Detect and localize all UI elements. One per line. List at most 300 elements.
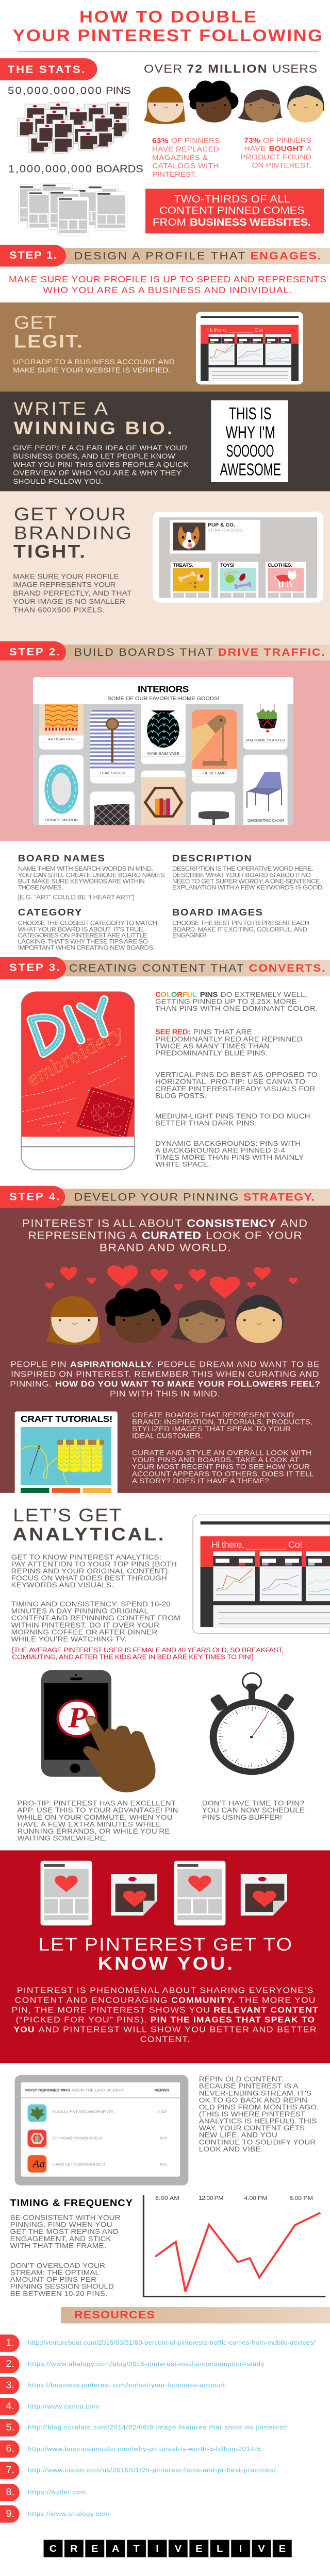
logo: creativelive: [43, 2540, 292, 2557]
stat: 63 percent: OF PINNERS: [171, 137, 220, 145]
step 1 intro: MAKE SURE YOUR PROFILE IS UP TO SPEED AND REPRESENTS: [9, 275, 326, 284]
step 4 banner: [0, 1186, 330, 1208]
step 1 intro: [9, 275, 326, 295]
row: succulent: 1,047: [157, 2110, 168, 2114]
sample bio card: THIS IS: [229, 404, 272, 423]
text: description: EXPLANATION WITH A FEW KEYWORDS IS GOOD.: [172, 884, 324, 891]
stat: 63 percent: 63%: [152, 137, 168, 145]
title: HOW TO DOUBLE: [79, 8, 256, 26]
text: pinterest analytics: REPINS AND YOUR ORIGINAL CONTENT).: [11, 1568, 170, 1575]
text: pinterest analytics: [11, 1554, 177, 1589]
text: board names: YOU CAN STILL CREATE UNIQUE BOARD NAMES: [18, 872, 165, 878]
pin: macrame planter: [243, 704, 288, 750]
analytics tablet: Hi there, ________ Co!: [211, 1540, 302, 1550]
sample bio card: [211, 400, 288, 482]
text: community: CONTENT AND ENCOURAGING: [15, 1995, 167, 2005]
text: vertical pins: BLOG POSTS.: [155, 1092, 206, 1100]
text: schedule pins: YOU CAN NOW SCHEDULE: [202, 1807, 305, 1815]
heading: branding: BRANDING: [14, 522, 131, 543]
text: branding: YOUR IMAGE IS NO SMALLER: [13, 598, 125, 606]
pin: desk lamp: DESK LAMP: [203, 771, 226, 775]
text: be consistent: GET THE MOST REPINS AND: [10, 2228, 119, 2236]
resources list: https://www.ahalogy.com/blog/2015-pinterest-media-consumption-study: [28, 2361, 265, 2367]
text: community: COMMUNITY.: [171, 1995, 235, 2005]
text: see red: SEE RED:: [155, 1028, 190, 1036]
text: schedule pins: DON’T HAVE TIME TO PIN?: [202, 1800, 304, 1807]
people faces: [144, 81, 324, 124]
icon: boards and pins with hearts: [41, 1861, 287, 1925]
resources banner: RESOURCES: [74, 2309, 155, 2321]
pin: stool: [191, 791, 235, 825]
pin: wabi-sabi vase: WABI-SABI VASE: [147, 751, 179, 756]
text: represent your brand: CREATE BOARDS THAT REPRESENT YOUR: [132, 1412, 294, 1419]
text: timing and consistency: MORNING COFFEE OR AFTER DINNER: [11, 1629, 157, 1636]
resources list: https://buffer.com: [28, 2489, 86, 2496]
text: community: CONTENT.: [140, 2035, 190, 2044]
text: aspirationally: [10, 1360, 320, 1398]
text: description: [172, 854, 324, 891]
row: honeycomb: DIY HONEYCOMB SHELF: [53, 2136, 103, 2140]
text: repin old content: LOOK AND VIBE.: [199, 2145, 263, 2154]
text: repin old content: ANALYTICS IS HELPFUL!). THIS: [199, 2117, 317, 2125]
resources list: http://www.businessinsider.com/why-pinterest-is-worth-5-billion-2014-5: [28, 2446, 261, 2452]
callout: two-thirds: [145, 189, 324, 233]
text: category: WHAT YOUR BOARD IS ABOUT. IT'S TRUE,: [18, 926, 145, 933]
pin: macrame planter: MACRAME PLANTER: [246, 738, 286, 742]
text: get legit: [13, 359, 175, 375]
board title: [108, 684, 219, 702]
heading: analytical: ANALYTICAL.: [12, 1524, 164, 1544]
text: board names: THOSE NAMES.: [18, 884, 63, 891]
table header: REPINS: [154, 2088, 170, 2092]
icon: toys: [224, 572, 252, 589]
text: vertical pins: VERTICAL PINS DO BEST AS OPPOSED TO: [155, 1071, 318, 1079]
text: timing and consistency: [11, 1601, 180, 1643]
resources list: https://business.pinterest.com/en/set-your-business-account: [28, 2382, 225, 2388]
pin: wabi-sabi vase: [141, 704, 186, 764]
text: timing and consistency: MINUTES A DAY PINNING ORIGINAL: [11, 1607, 148, 1615]
icon: pile of boards: [19, 183, 127, 236]
profile mockup: TREATS.: [173, 563, 193, 568]
stat: 73 percent: PRODUCT FOUND: [240, 154, 311, 161]
pin: DIY embroidery: [21, 992, 135, 1170]
row: honeycomb: [28, 2130, 168, 2147]
text: timing and consistency: TIMING AND CONSISTENCY: SPEND 10-20: [11, 1601, 171, 1608]
heading: pins count: PINS: [106, 85, 131, 96]
heading: winning bio: WINNING BIO.: [14, 418, 173, 438]
pin: ornate mirror: [39, 755, 84, 825]
profile mockup: PUP & CO.: [208, 523, 235, 528]
profile mockup: STUFF FOR DOGS.: [208, 528, 243, 532]
text: board names: [E.G. “ART” COULD BE “I HEART ART!”]: [18, 894, 135, 901]
pin: artisan rug: ARTISAN RUG: [48, 737, 75, 741]
pin: teak spoon: [90, 710, 135, 783]
line chart: repins by time: [143, 2195, 325, 2297]
text: community: (“PICKED FOR YOU” PINS).: [16, 2015, 146, 2024]
heading: get legit: GET: [14, 312, 56, 332]
text: schedule pins: PINS USING BUFFER!: [202, 1814, 282, 1822]
sample bio card: SOOOOO: [226, 442, 274, 461]
step 3 banner: CONVERTS.: [249, 962, 325, 974]
text: pinterest analytics: PAY ATTENTION TO YOUR TOP PINS (BOTH: [11, 1561, 177, 1568]
stat: 73 percent: OF PINNERS: [263, 137, 311, 145]
panel: pinning strategy: [0, 1186, 330, 1493]
resources list: 9.: [6, 2509, 14, 2519]
resources list: 1.: [6, 2338, 14, 2348]
text: board names: [18, 854, 165, 901]
text: colorful pins: PINS: [200, 991, 218, 999]
text: pinterest analytics: KEYWORDS AND VISUALS.: [11, 1582, 113, 1589]
board title: INTERIORS: [138, 684, 189, 694]
text: colorful pins: COLORFUL: [155, 991, 197, 999]
text: pro-tip: WAITING SOMEWHERE.: [18, 1835, 107, 1842]
text: winning bio: BUSINESS DOES, AND LET PEOPLE KNOW: [13, 453, 175, 461]
panel: branding: [0, 492, 330, 664]
text: category: CHOOSE THE CLOSEST CATEGORY TO MATCH: [18, 920, 157, 927]
pin: desk lamp: [192, 710, 237, 783]
row: hand lettering: 895: [160, 2162, 168, 2167]
line chart: repins by time: 12:00 PM: [199, 2195, 223, 2201]
text: consistency: REPRESENTING A: [28, 1229, 137, 1242]
text: dynamic backgrounds: DYNAMIC BACKGROUNDS: PINS WITH: [155, 1140, 301, 1148]
step 1 intro: WHO YOU ARE AS A BUSINESS AND INDIVIDUAL.: [43, 285, 292, 295]
step 2 banner: STEP 2.: [9, 647, 60, 658]
text: board names: BOARD NAMES: [18, 854, 105, 864]
text: pinterest analytics: GET TO KNOW PINTEREST ANALYTICS:: [11, 1554, 161, 1562]
heading: timing and frequency: TIMING & FREQUENCY: [10, 2198, 133, 2209]
resources list: 4.: [6, 2401, 14, 2412]
text: colorful pins: [155, 991, 318, 1013]
craft tutorials board: [15, 1412, 118, 1493]
text: repin old content: CONTINUE TO SOLIDIFY YOUR: [199, 2139, 316, 2146]
text: winning bio: OVERVIEW OF WHO YOU ARE & WHY THEY: [13, 469, 182, 478]
text: consistency: [22, 1217, 307, 1253]
callout: two-thirds: TWO-THIRDS OF ALL: [174, 194, 290, 205]
step 2 banner: BUILD BOARDS THAT: [74, 646, 213, 658]
text: colorful pins: DO EXTREMELY WELL,: [221, 991, 307, 999]
title: YOUR PINTEREST FOLLOWING: [12, 26, 322, 45]
text: be consistent: ENGAGEMENT, AND STICK: [10, 2235, 111, 2243]
text: be consistent: PINNING. FIND WHEN YOU: [10, 2221, 112, 2229]
text: timing and consistency: CONTENT AND REPINNING CONTENT FROM: [11, 1615, 180, 1622]
heading: know you: LET PINTEREST GET TO: [38, 1934, 292, 1955]
text: pro-tip: PRO-TIP: PINTEREST HAS AN EXCELLENT: [18, 1800, 176, 1807]
text: get legit: MAKE SURE YOUR WEBSITE IS VERIFIED.: [13, 367, 171, 375]
text: category: [18, 908, 157, 952]
heading: analytical: [12, 1505, 164, 1544]
text: winning bio: SHOULD FOLLOW YOU.: [13, 478, 103, 486]
heading: users: 72 MILLION: [187, 62, 267, 75]
icon: dog: [178, 526, 200, 549]
text: average user note: [THE AVERAGE PINTEREST USER IS FEMALE AND 40 YEARS OLD, SO BREAKFAST,: [12, 1647, 284, 1654]
text: don't overload: AMOUNT OF PINS PER: [10, 2276, 96, 2284]
craft tutorials board: CRAFT TUTORIALS!: [21, 1414, 112, 1424]
stat: 73 percent: ON PINTEREST.: [252, 162, 311, 170]
heading: know you: [38, 1934, 292, 1973]
text: vertical pins: [155, 1071, 318, 1100]
line chart: repins by time: 8:00 PM: [289, 2195, 313, 2201]
step 4 banner: STRATEGY.: [243, 1191, 315, 1203]
logo: creativelive: C: [50, 2544, 57, 2554]
icon: knitting: [21, 1439, 104, 1485]
heading: users: USERS: [272, 62, 317, 75]
text: description: NEED TO GET SUPER WORDY; A ONE-SENTENCE: [172, 878, 320, 885]
text: don't overload: PINNING SESSION SHOULD: [10, 2283, 114, 2291]
text: community: YOU: [13, 2025, 34, 2034]
text: board images: CHOOSE THE BEST PIN TO REPRESENT EACH: [172, 920, 309, 927]
text: be consistent: BE CONSISTENT WITH YOUR: [10, 2214, 120, 2222]
text: repin old content: OLD PINS FROM MONTHS AGO.: [199, 2104, 319, 2111]
callout: two-thirds: CONTENT PINNED COMES: [159, 205, 305, 216]
text: consistency: CURATED: [142, 1229, 201, 1242]
pin: geometric chair: GEOMETRIC CHAIR: [248, 819, 285, 823]
stat: 63 percent: MAGAZINES &: [152, 154, 208, 162]
sample bio card: AWESOME: [220, 460, 281, 479]
step 2 banner: DRIVE TRAFFIC.: [218, 646, 325, 658]
text: be consistent: [10, 2214, 120, 2250]
text: branding: BRAND PERFECTLY, AND THAT: [13, 589, 131, 598]
text: pro-tip: APP. USE THIS TO YOUR ADVANTAGE! PIN: [18, 1807, 178, 1815]
stat: 73 percent: HAVE: [244, 145, 266, 153]
text: be consistent: WITH THAT TIME FRAME.: [10, 2242, 106, 2250]
stat: 63 percent: PINTEREST.: [152, 171, 197, 179]
text: description: DESCRIPTION IS THE OPERATIVE WORD HERE.: [172, 866, 314, 872]
icon: stopwatch: [210, 1673, 295, 1775]
board title: SOME OF OUR FAVORITE HOME GOODS!: [108, 696, 219, 702]
text: branding: THAN 600X600 PIXELS.: [13, 606, 105, 614]
text: board names: NAME THEM WITH SEARCH WORDS IN MIND.: [18, 866, 153, 872]
text: aspirationally: PINNING.: [10, 1379, 52, 1388]
stats tab: [0, 58, 97, 80]
text: see red: TWICE AS MANY TIMES THAN: [155, 1042, 270, 1050]
text: category: LACKING-THAT'S WHY THESE TIPS ARE SO: [18, 938, 148, 945]
stat: 73 percent: BOUGHT: [269, 145, 304, 153]
text: community: AND PINTEREST WILL SHOW YOU BETTER AND BETTER: [39, 2025, 316, 2034]
text: category: CATEGORIES ON PINTEREST ARE A LITTLE: [18, 932, 147, 939]
step 4 banner: STEP 4.: [9, 1191, 60, 1202]
text: curate and style: CURATE AND STYLE AN OVERALL LOOK WITH: [132, 1449, 311, 1457]
text: board images: BOARD. MAKE IT EXCITING, COLORFUL, AND: [172, 926, 307, 933]
text: consistency: PINTEREST IS ALL ABOUT: [22, 1217, 182, 1229]
pin: teak spoon: TEAK SPOON: [100, 771, 125, 775]
resources list: http://www.cision.com/us/2015/01/25-pinterest-facts-and-pr-best-practices/: [28, 2467, 276, 2473]
logo: creativelive: A: [112, 2544, 120, 2554]
text: winning bio: WHAT YOU PIN! THIS GIVES PEOPLE A QUICK: [13, 461, 189, 469]
logo: creativelive: V: [175, 2544, 182, 2554]
logo: creativelive: L: [217, 2544, 223, 2554]
profile mockup: CLOTHES.: [268, 563, 292, 568]
logo: creativelive: T: [133, 2544, 140, 2554]
step 1 banner: DESIGN A PROFILE THAT: [74, 250, 245, 262]
text: community: [11, 1986, 318, 2044]
panel: board mockup: [0, 660, 330, 841]
resources list: http://blog.curalate.com/2014/02/06/8-image-features-that-shine-on-pinterest/: [28, 2424, 288, 2431]
stat: 73 percent: [240, 137, 311, 170]
line chart: repins by time: 4:00 PM: [244, 2195, 267, 2201]
text: board images: [172, 908, 309, 939]
icon: analytics tablet small: [196, 312, 303, 384]
panel: winning bio: [0, 392, 330, 492]
text: timing and consistency: WITHIN PINTEREST. DO IT OVER YOUR: [11, 1621, 159, 1630]
resources list: 6.: [6, 2444, 14, 2454]
resources list: 3.: [6, 2380, 14, 2391]
text: represent your brand: STYLIZED IMAGES THAT SPEAK TO YOUR: [132, 1426, 291, 1433]
text: category: CATEGORY: [18, 908, 82, 918]
row: hand lettering: HAND LETTERING BASICS: [53, 2162, 106, 2167]
fabric patch: [76, 1087, 135, 1140]
heading: winning bio: [14, 398, 173, 438]
heading: winning bio: WRITE A: [14, 398, 108, 419]
logo: creativelive: R: [70, 2544, 78, 2554]
resources banner: [61, 2307, 330, 2324]
text: see red: PREDOMINANTLY BLUE PINS.: [155, 1049, 268, 1057]
text: aspirationally: PEOPLE PIN: [10, 1360, 67, 1369]
resources list: http://venturebeat.com/2015/03/31/80-percent-of-pinterests-traffic-comes-from-mobile-devices/: [28, 2340, 316, 2346]
pin: DIY embroidery: embroidery: [21, 1020, 128, 1091]
text: medium-light pins: [155, 1113, 310, 1128]
text: timing and consistency: WHILE YOU’RE WATCHING TV.: [11, 1636, 127, 1643]
sample bio card: WHY I'M: [226, 423, 275, 442]
icon: hearts: [45, 1265, 298, 1299]
text: medium-light pins: BETTER THAN DARK PINS.: [155, 1120, 257, 1128]
step 1 banner: [0, 245, 330, 266]
row: honeycomb: 963: [160, 2136, 168, 2140]
text: community: PINTEREST IS PHENOMENAL ABOUT SHARING EVERYONE’S: [17, 1986, 313, 1995]
stat: 63 percent: HAVE REPLACED: [152, 146, 219, 154]
text: dynamic backgrounds: A BACKGROUND ARE PINNED 2-4: [155, 1147, 285, 1155]
text: branding: [13, 573, 131, 614]
text: pinterest analytics: FOCUS ON WHAT DOES BEST THROUGH: [11, 1574, 167, 1582]
icon: analytics tablet small: Hi there, ________ Co!: [207, 328, 263, 333]
text: aspirationally: HOW DO YOU WANT TO MAKE YOUR FOLLOWERS FEEL?: [55, 1379, 320, 1388]
text: repin old content: OK TO GO BACK AND REPIN: [199, 2096, 307, 2105]
heading: get legit: LEGIT.: [14, 331, 82, 351]
title: [12, 8, 322, 45]
text: consistency: LOOK OF YOUR: [206, 1229, 302, 1242]
analytics tablet: [193, 1515, 330, 1633]
text: community: PIN, THE MORE PINTEREST SHOWS YOU: [11, 2005, 210, 2014]
stats tab: THE STATS.: [8, 64, 85, 76]
pin: ornate mirror: ORNATE MIRROR: [45, 818, 78, 822]
text: consistency: AND: [280, 1217, 307, 1229]
text: medium-light pins: MEDIUM-LIGHT PINS TEND TO DO MUCH: [155, 1113, 310, 1121]
text: winning bio: GIVE PEOPLE A CLEAR IDEA OF WHAT YOUR: [13, 445, 187, 452]
step 1 banner: ENGAGES.: [251, 250, 321, 262]
text: see red: [155, 1028, 302, 1057]
panel: get legit: [0, 302, 330, 392]
text: don't overload: BE BETWEEN 10-20 PINS.: [10, 2290, 107, 2298]
heading: boards count: [8, 164, 143, 175]
text: average user note: [12, 1647, 284, 1660]
text: board images: ENGAGING!: [172, 932, 206, 939]
text: repin old content: (THIS IS WHERE PINTEREST: [199, 2111, 305, 2119]
profile mockup: TOYS!: [220, 563, 235, 568]
resources list: 8.: [6, 2487, 14, 2498]
text: consistency: BRAND AND WORLD.: [100, 1242, 231, 1253]
resources list: http://www.canva.com: [28, 2403, 99, 2410]
icon: phone with hand: P: [68, 1701, 88, 1734]
heading: boards count: 1,000,000,000: [8, 164, 92, 175]
text: branding: MAKE SURE YOUR PROFILE: [13, 573, 119, 581]
logo: creativelive: E: [195, 2544, 202, 2554]
text: don't overload: DON’T OVERLOAD YOUR: [10, 2262, 105, 2270]
text: community: THE MORE YOU: [239, 1995, 315, 2005]
stat: 63 percent: [152, 137, 220, 179]
text: curate and style: YOUR PINS AND BOARDS. TAKE A LOOK AT: [132, 1456, 299, 1464]
resources list: 7.: [6, 2465, 14, 2476]
logo: creativelive: V: [258, 2544, 265, 2554]
table header: [21, 2088, 180, 2098]
text: repin old content: NEW LIFE, AND YOU: [199, 2131, 277, 2140]
pin: pillow: [90, 791, 135, 825]
text: board names: BUT MAKE SURE KEYWORDS ARE WITHIN: [18, 878, 145, 885]
text: repin old content: WAY, YOUR CONTENT GETS: [199, 2125, 305, 2132]
step 1 banner: STEP 1.: [9, 250, 57, 261]
heading: users: [144, 62, 317, 75]
text: see red: PREDOMINANTLY RED ARE REPINNED: [155, 1036, 302, 1043]
heading: users: OVER: [144, 62, 182, 75]
table header: FROM THE LAST 30 DAYS: [72, 2088, 124, 2092]
heading: boards count: BOARDS: [96, 164, 143, 175]
logo: creativelive: I: [156, 2544, 159, 2554]
callout: two-thirds: FROM: [153, 217, 186, 228]
text: aspirationally: PIN WITH THIS IN MIND.: [110, 1389, 220, 1398]
text: pro-tip: [18, 1800, 178, 1842]
text: pro-tip: HAVE A FEW EXTRA MINUTES WHILE: [18, 1821, 161, 1828]
text: don't overload: [10, 2262, 114, 2298]
text: dynamic backgrounds: WHITE SPACE.: [155, 1161, 210, 1168]
heading: get legit: [14, 312, 82, 351]
stat: 73 percent: 73%: [244, 137, 260, 145]
icon: cat: [274, 569, 296, 588]
text: dynamic backgrounds: [155, 1140, 304, 1168]
resources list: 2.: [6, 2359, 14, 2369]
text: repin old content: REPIN OLD CONTENT:: [199, 2076, 284, 2083]
step 3 banner: CREATING CONTENT THAT: [69, 962, 244, 974]
resources list: https://www.ahalogy.com: [28, 2511, 109, 2517]
text: description: DESCRIPTION: [172, 854, 252, 864]
heading: branding: TIGHT.: [13, 541, 85, 562]
text: curate and style: A STORY? DOES IT HAVE A THEME?: [132, 1477, 269, 1485]
text: dynamic backgrounds: TIMES MORE THAN PINS WITH MAINLY: [155, 1154, 304, 1162]
logo: creativelive: E: [279, 2544, 286, 2554]
stat: 73 percent: A: [306, 145, 311, 153]
text: pro-tip: RUNNING ERRANDS, OR WHILE YOU’RE: [18, 1828, 170, 1836]
pin: artisan rug: [39, 704, 84, 750]
text: aspirationally: INSPIRED ON PINTEREST. REMEMBER THIS WHEN CURATING AND: [11, 1369, 319, 1379]
icon: pile of pins: [18, 103, 128, 153]
text: don't overload: STREAM: THE OPTIMAL: [10, 2269, 100, 2277]
table header: MOST REPINNED PINS: [25, 2088, 71, 2092]
icon: treats: [178, 571, 204, 588]
text: repin old content: NEVER-ENDING STREAM, IT’S: [199, 2090, 311, 2097]
heading: know you: KNOW YOU.: [98, 1953, 233, 1973]
text: pro-tip: WHILE ON YOUR COMMUTE, WHEN YOU: [18, 1814, 173, 1822]
step 3 banner: STEP 3.: [9, 962, 60, 973]
text: average user note: COMMUTING, AND AFTER THE KIDS ARE IN BED ARE KEY TIMES TO PIN!]: [12, 1653, 254, 1660]
text: vertical pins: HORIZONTAL. PRO-TIP: USE CANVA TO: [155, 1078, 305, 1086]
text: curate and style: [132, 1449, 314, 1485]
row: hand lettering: Aa: [31, 2158, 45, 2170]
text: vertical pins: CREATE PINTEREST-READY VISUALS FOR: [155, 1085, 315, 1093]
text: consistency: CONSISTENCY: [187, 1217, 276, 1229]
text: community: PIN THE IMAGES THAT SPEAK TO: [151, 2015, 315, 2024]
heading: pins count: 50,000,000,000: [8, 85, 102, 96]
heading: branding: [13, 504, 131, 562]
row: succulent: SUCCULENT ARRANGEMENTS: [53, 2110, 114, 2114]
row: hand lettering: [28, 2155, 168, 2173]
text: schedule pins: [202, 1800, 305, 1822]
